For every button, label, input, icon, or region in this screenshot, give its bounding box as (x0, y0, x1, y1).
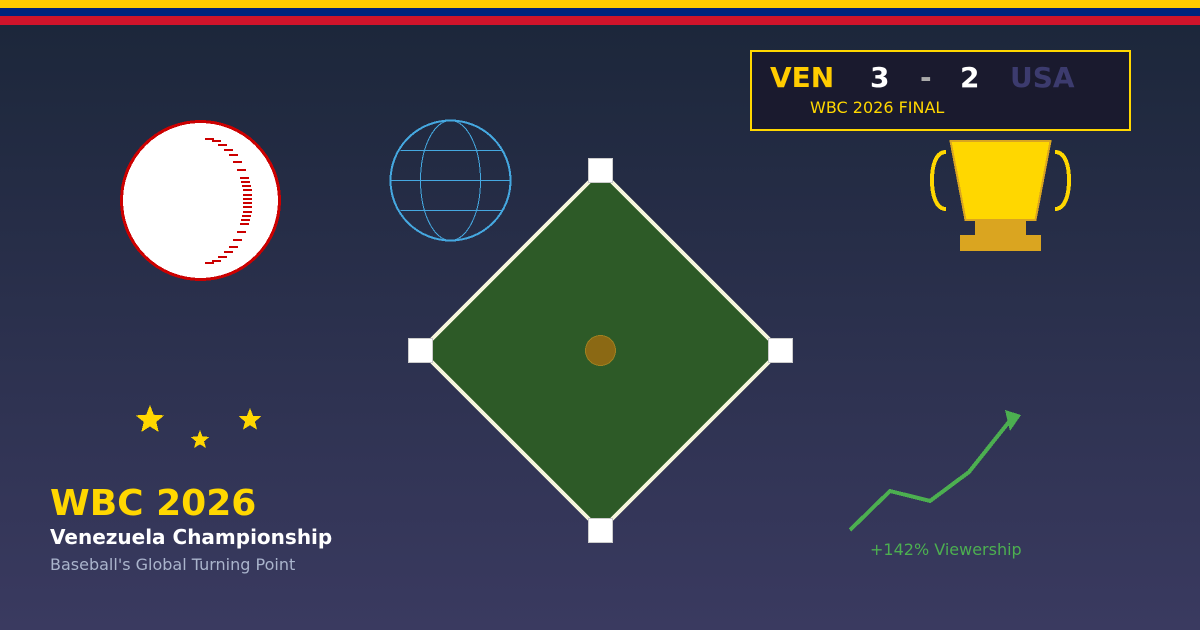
scoreboard (751, 51, 1130, 130)
team: Venezuela: VEN (770, 61, 834, 94)
icon: baseball (122, 122, 280, 280)
title: WBC 2026 (50, 483, 256, 524)
tagline: Baseball's Global Turning Point (50, 555, 295, 574)
score: Venezuela: 3 (870, 61, 889, 94)
home plate (588, 518, 612, 542)
viewership growth arrow (850, 410, 1022, 559)
third base (408, 338, 432, 362)
score separator: - (920, 61, 932, 94)
icon: stars (136, 405, 261, 448)
infield (420, 170, 780, 530)
first base (768, 338, 792, 362)
scoreboard caption: WBC 2026 FINAL (810, 98, 944, 117)
pitcher's mound (586, 336, 616, 366)
viewership label: +142% Viewership (870, 540, 1022, 559)
flag stripes (0, 0, 1200, 25)
second base (588, 158, 612, 182)
icon: trophy (932, 141, 1069, 251)
icon: globe (390, 120, 510, 240)
score: USA: 2 (960, 61, 979, 94)
title block (50, 483, 332, 574)
team: USA: USA (1010, 61, 1075, 94)
baseball diamond (408, 158, 792, 542)
subtitle: Venezuela Championship (50, 525, 332, 549)
